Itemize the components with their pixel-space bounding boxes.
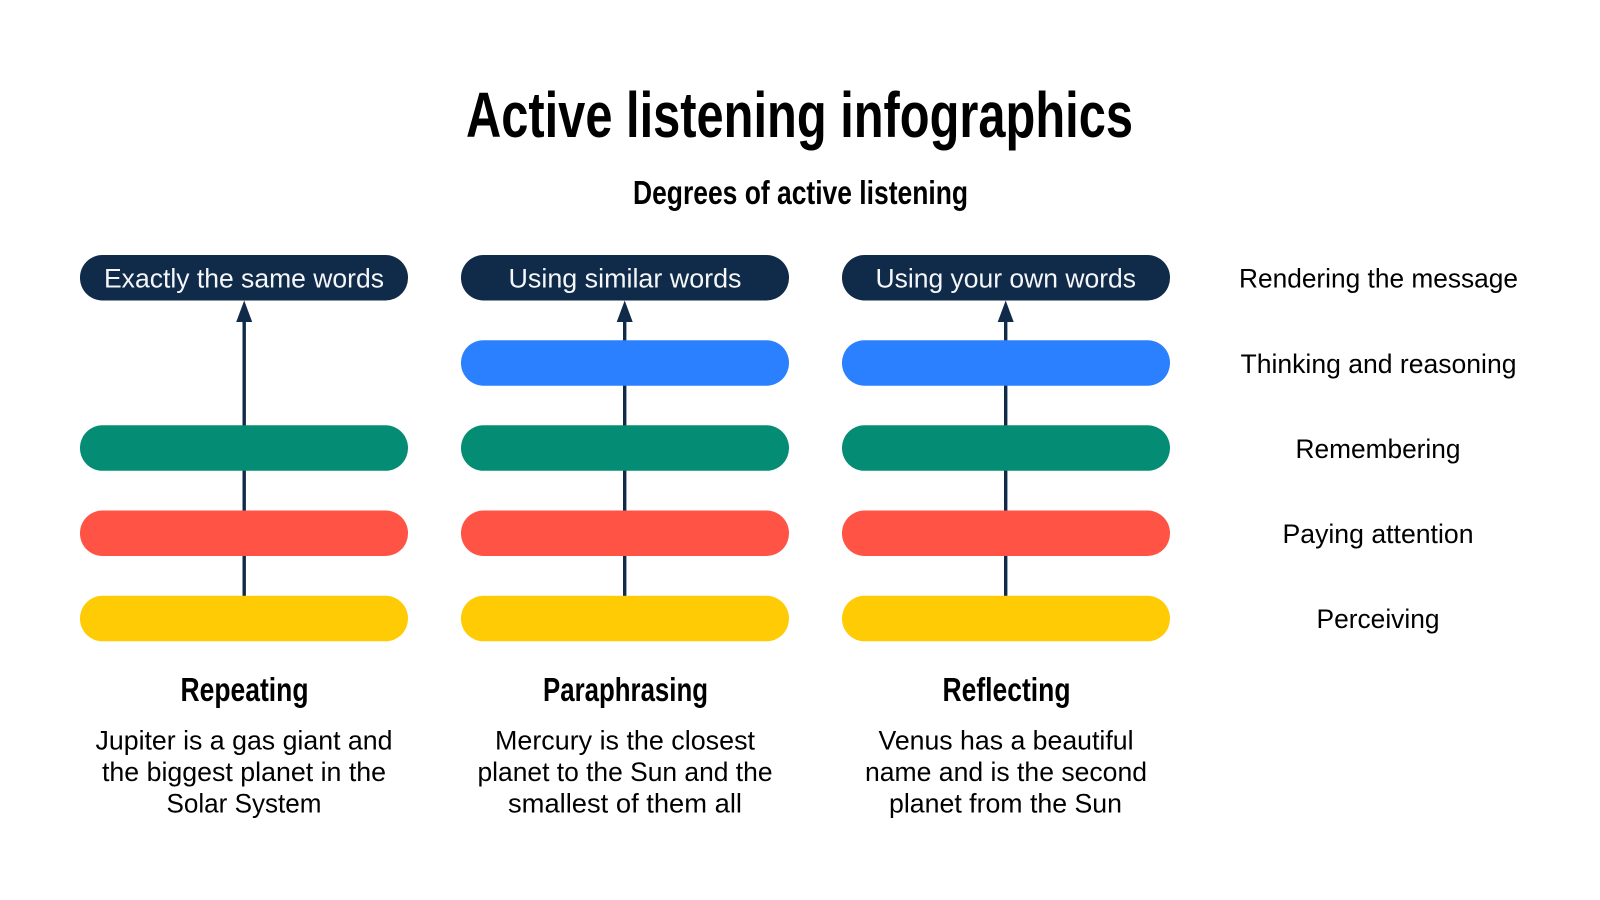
text: reflecting description: planet from the Sun [889, 788, 1122, 818]
text: repeating description: the biggest planet in the [102, 757, 386, 787]
top pill: using your own words [842, 255, 1170, 300]
text: reflecting description [865, 726, 1147, 818]
panel: reflecting column [842, 255, 1170, 818]
text: repeating description [96, 726, 392, 818]
heading: repeating: Repeating [180, 671, 308, 708]
arrow: reflecting [998, 300, 1014, 598]
top pill: exactly the same words [80, 255, 408, 300]
label: rendering the message: Rendering the message [1239, 264, 1518, 294]
text: paraphrasing description [478, 726, 772, 818]
text: repeating description: Solar System [166, 788, 322, 818]
text: paraphrasing description: smallest of them all [508, 788, 742, 818]
bar: perceiving [80, 596, 408, 641]
heading: paraphrasing: Paraphrasing [543, 671, 708, 708]
text: repeating description: Jupiter is a gas giant and [96, 726, 392, 756]
bar: perceiving [842, 596, 1170, 641]
top pill: using your own words: Using your own words [876, 264, 1136, 294]
bar: thinking and reasoning [842, 340, 1170, 386]
label: remembering: Remembering [1296, 434, 1460, 464]
text: reflecting description: name and is the second [865, 757, 1147, 787]
panel: repeating column [80, 255, 408, 818]
arrow: repeating [236, 300, 252, 598]
bar: remembering [461, 425, 789, 471]
text: paraphrasing description: Mercury is the closest [495, 726, 755, 756]
subtitle: Degrees of active listening [633, 174, 968, 211]
bar: perceiving [461, 596, 789, 641]
top pill: exactly the same words: Exactly the same words [104, 264, 384, 294]
top pill: using similar words: Using similar words [508, 264, 742, 294]
panel: paraphrasing column [461, 255, 789, 818]
bar: remembering [842, 425, 1170, 471]
panel: level labels [1239, 264, 1518, 634]
bar: remembering [80, 425, 408, 471]
bar: paying attention [842, 510, 1170, 556]
heading: reflecting: Reflecting [942, 671, 1070, 708]
top pill: using similar words [461, 255, 789, 300]
label: thinking and reasoning: Thinking and reasoning [1240, 349, 1516, 379]
text: reflecting description: Venus has a beautiful [878, 726, 1134, 756]
text: paraphrasing description: planet to the Sun and the [478, 757, 772, 787]
label: perceiving: Perceiving [1316, 604, 1440, 634]
arrow: paraphrasing [617, 300, 633, 598]
label: paying attention: Paying attention [1282, 519, 1474, 549]
bar: thinking and reasoning [461, 340, 789, 386]
title: Active listening infographics [466, 79, 1133, 151]
bar: paying attention [80, 510, 408, 556]
bar: paying attention [461, 510, 789, 556]
